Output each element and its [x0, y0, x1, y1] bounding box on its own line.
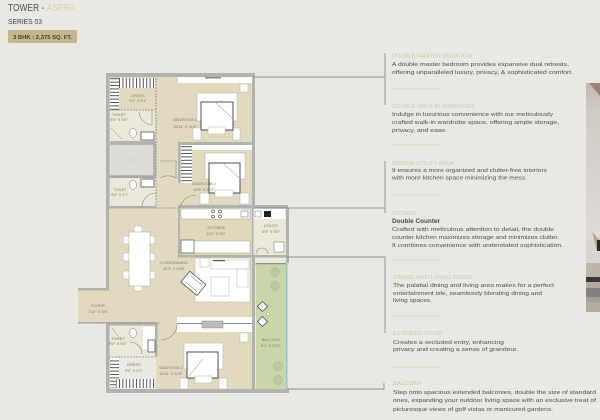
text block: indoor utility area: with more kitchen space minimizing the mess. — [391, 176, 527, 182]
room labels: FOYER — [91, 303, 105, 308]
text block: kitchen: It combines convenience with understated sophistication. — [392, 243, 563, 249]
text block: balcony — [393, 381, 596, 413]
text block: kitchen: Double Counter — [392, 219, 441, 225]
kitchen fixtures — [181, 209, 250, 253]
dress 3 closets — [110, 358, 154, 388]
text block: extended foyer — [393, 331, 518, 353]
room labels: LIVING/DINING — [160, 260, 188, 265]
text block: double walk-in wardrobe: privacy, and ease. — [392, 128, 447, 134]
text block: extended foyer: Creates a secluded entry, enhancing — [393, 340, 504, 346]
text block: double master bedroom: DOUBLE MASTER BEDROOM — [392, 54, 472, 60]
room labels: 12'9" X 8'0" — [206, 231, 227, 236]
room labels: 16'11" X 11'8" — [159, 371, 183, 376]
panel: second toilet — [110, 178, 156, 207]
text block: dining and living room: The palatial dining and living area makes for a perfect — [393, 283, 554, 289]
second toilet fixtures — [130, 161, 196, 208]
room labels: BEDROOM-3 — [159, 365, 183, 370]
bedroom 3 furniture — [161, 317, 252, 389]
room labels: 16'11" X 11'8" — [173, 124, 197, 129]
leader line: bedroom and wardrobe — [253, 53, 385, 105]
room labels: 9'0" X 5'0" — [110, 117, 128, 122]
text block: dining and living room: DINING AND LIVING ROOM — [393, 275, 472, 281]
text block: balcony: picturesque views of golf vistas or manicured gardens. — [393, 407, 553, 413]
room labels: 9'0" X 6'1" — [125, 368, 143, 373]
walls — [78, 73, 289, 393]
text block: double walk-in wardrobe: DOUBLE WALK-IN WARDROBE — [392, 104, 475, 110]
room labels: BEDROOM-1 — [173, 117, 197, 122]
text block: dining and living room: living spaces. — [393, 298, 432, 304]
room labels: DRESS — [127, 362, 141, 367]
text block: double master bedroom: offering unparalleled luxury, privacy, & sophisticated comfort. — [392, 70, 573, 76]
floor: main beige area — [78, 77, 253, 390]
room labels: 9'0" X 6'1" — [129, 98, 147, 103]
dress 1 closets — [110, 78, 155, 110]
bedroom 2 furniture — [181, 145, 252, 204]
room labels: 7'10" X 5'6" — [88, 309, 109, 314]
text block: indoor utility area: INDOOR UTILITY AREA — [392, 161, 454, 167]
text block: double master bedroom: A double master bedroom provides expansive dual retreats, — [392, 62, 569, 68]
panel: kitchen floor — [179, 208, 253, 257]
living room furniture — [181, 258, 250, 302]
room labels: 6'1" X 23'5" — [261, 343, 282, 348]
room labels: TOILET — [113, 187, 127, 192]
text block: double master bedroom — [392, 54, 573, 76]
text block: kitchen — [392, 211, 563, 249]
lower toilet fixtures — [112, 327, 155, 354]
room labels: KITCHEN — [207, 225, 225, 230]
text block: kitchen: counter kitchen maximizes storage and minimizes clutter. — [392, 235, 559, 241]
text block: indoor utility area — [391, 161, 547, 182]
leader line: living and foyer — [287, 257, 385, 333]
text block: dining and living room — [393, 275, 554, 304]
text block: extended foyer: privacy and creating a sense of grandeur. — [393, 347, 518, 353]
leader line: balcony — [287, 383, 384, 389]
room labels: 20'3" X 20'8" — [163, 266, 186, 271]
room labels: TOILET — [111, 336, 125, 341]
text block: double walk-in wardrobe — [392, 104, 559, 134]
text block: dining and living room: entertainment isle, seamlessly blending dining and — [393, 291, 542, 297]
floor plan — [78, 73, 289, 393]
panel: lower toilet — [110, 326, 156, 357]
room labels: 9'0" X 5'0" — [109, 341, 127, 346]
panel: shaft — [110, 141, 156, 179]
leader line: utility and kitchen — [253, 161, 385, 213]
room labels: 13'9" X 11'5" — [193, 187, 215, 192]
utility fixtures — [254, 209, 285, 254]
area badge: 3 BHK : 2,375 SQ. FT. — [13, 35, 73, 41]
text block: balcony: Step onto spacious extended balconies, double the size of standard — [393, 390, 596, 396]
text block: double walk-in wardrobe: crafted walk-in wardrobe space, offering ample storage, — [392, 120, 559, 126]
text block: extended foyer: EXTENDED FOYER — [393, 331, 443, 337]
text block: indoor utility area: It ensures a more organized and clutter-free interiors — [392, 168, 547, 174]
title: TOWER - ASPRA — [8, 3, 75, 14]
room labels: BEDROOM-2 — [192, 181, 216, 186]
room labels: TOILET — [112, 112, 126, 117]
room labels: BALCONY — [262, 337, 281, 342]
room labels: UTILITY — [264, 223, 279, 228]
room labels: 9'0" X 4'7" — [111, 192, 129, 197]
panel: balcony — [256, 263, 288, 390]
dashed partitions — [78, 78, 287, 357]
panel: top toilet — [110, 110, 155, 141]
top toilet fixtures — [111, 110, 154, 140]
room labels: DRESS — [131, 93, 145, 98]
panel: utility floor — [253, 208, 286, 257]
bedroom 1 furniture — [178, 77, 252, 140]
room labels: 5'9" X 8'0" — [262, 229, 280, 234]
area badge — [8, 30, 77, 43]
text block: kitchen: Crafted with meticulous attention to detail, the double — [392, 227, 555, 233]
text block: double walk-in wardrobe: Indulge in luxurious convenience with our meticulously — [392, 112, 553, 118]
text block: kitchen: KITCHEN — [392, 211, 416, 217]
dining table — [123, 226, 155, 291]
series label: SERIES 03 — [8, 19, 42, 26]
text block: balcony: ones, expanding your outdoor living space with an exclusive treat of — [393, 398, 596, 404]
text block: balcony: BALCONY — [393, 381, 422, 387]
interior photo strip — [586, 83, 600, 312]
room labels — [88, 93, 282, 376]
